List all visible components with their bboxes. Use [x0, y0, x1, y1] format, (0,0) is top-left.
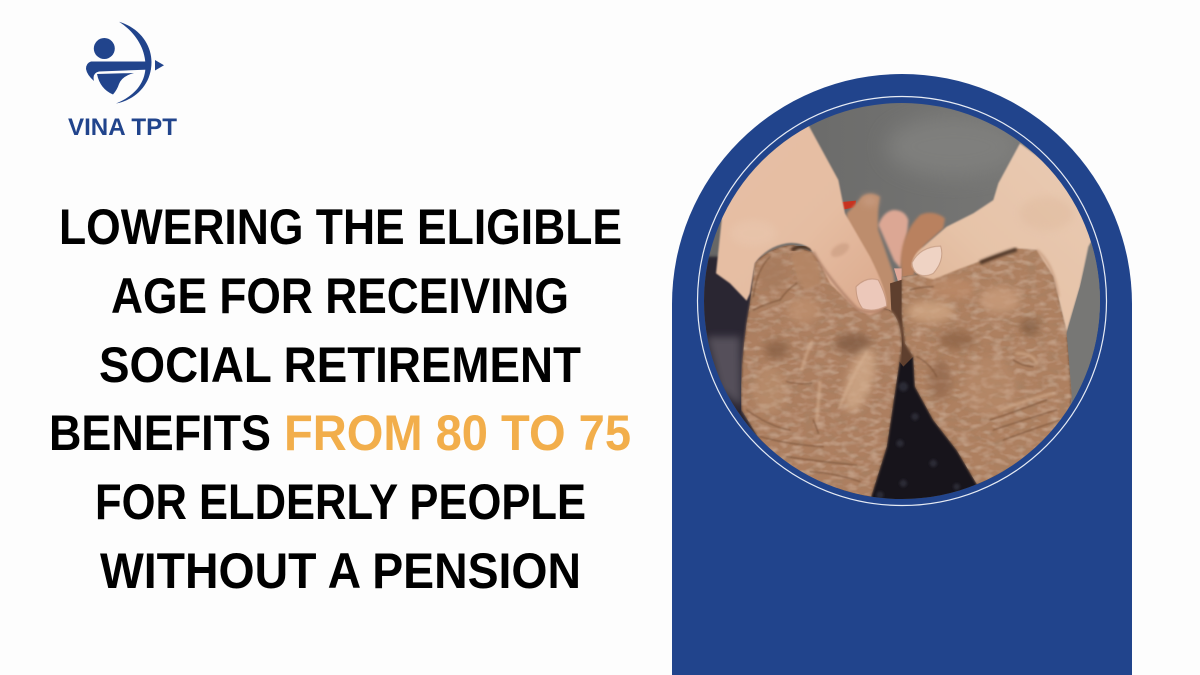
- white ring: [698, 96, 1106, 506]
- thumbnail: right: [912, 246, 942, 276]
- icon: archer head: [94, 38, 115, 59]
- soft lights and shadows on elderly hands: [753, 257, 1040, 417]
- dark clothing: [704, 256, 770, 448]
- pink finger: [878, 210, 908, 268]
- logo wordmark: VINA TPT: [68, 114, 177, 141]
- title line 2: AGE FOR RECEIVING: [111, 268, 569, 324]
- gray gap right of wrist: [1067, 243, 1110, 403]
- panel: blue arch: [672, 74, 1132, 675]
- logo: VINA TPT: [68, 22, 177, 141]
- title: [49, 199, 631, 599]
- title line 5: FOR ELDERLY PEOPLE: [95, 474, 586, 530]
- title line 1: LOWERING THE ELIGIBLE: [59, 199, 622, 255]
- title line 4: BENEFITS: [49, 405, 271, 461]
- elderly right hand: [902, 247, 1072, 487]
- title highlight: from 80 to 75: FROM 80 TO 75: [284, 405, 631, 461]
- finger behind thumb: [846, 192, 896, 312]
- veins and wrinkles: [747, 257, 1060, 482]
- photo: hands holding: [690, 100, 1110, 503]
- elderly left hand: [741, 245, 902, 500]
- icon: archer arms and arrow: [86, 62, 151, 81]
- knuckle lump: [792, 251, 820, 290]
- title line 6: WITHOUT A PENSION: [100, 543, 581, 599]
- title line 3: SOCIAL RETIREMENT: [99, 337, 581, 393]
- brown finger: [900, 212, 946, 277]
- icon: arrow head: [155, 60, 164, 70]
- icon: bow arc: [116, 22, 152, 104]
- young left hand: [715, 126, 887, 316]
- shadow between the hands: [890, 277, 913, 367]
- thumbnail: left: [856, 279, 887, 310]
- young right hand: [912, 143, 1110, 332]
- red thread: [842, 201, 856, 209]
- icon: archer body: [97, 73, 134, 94]
